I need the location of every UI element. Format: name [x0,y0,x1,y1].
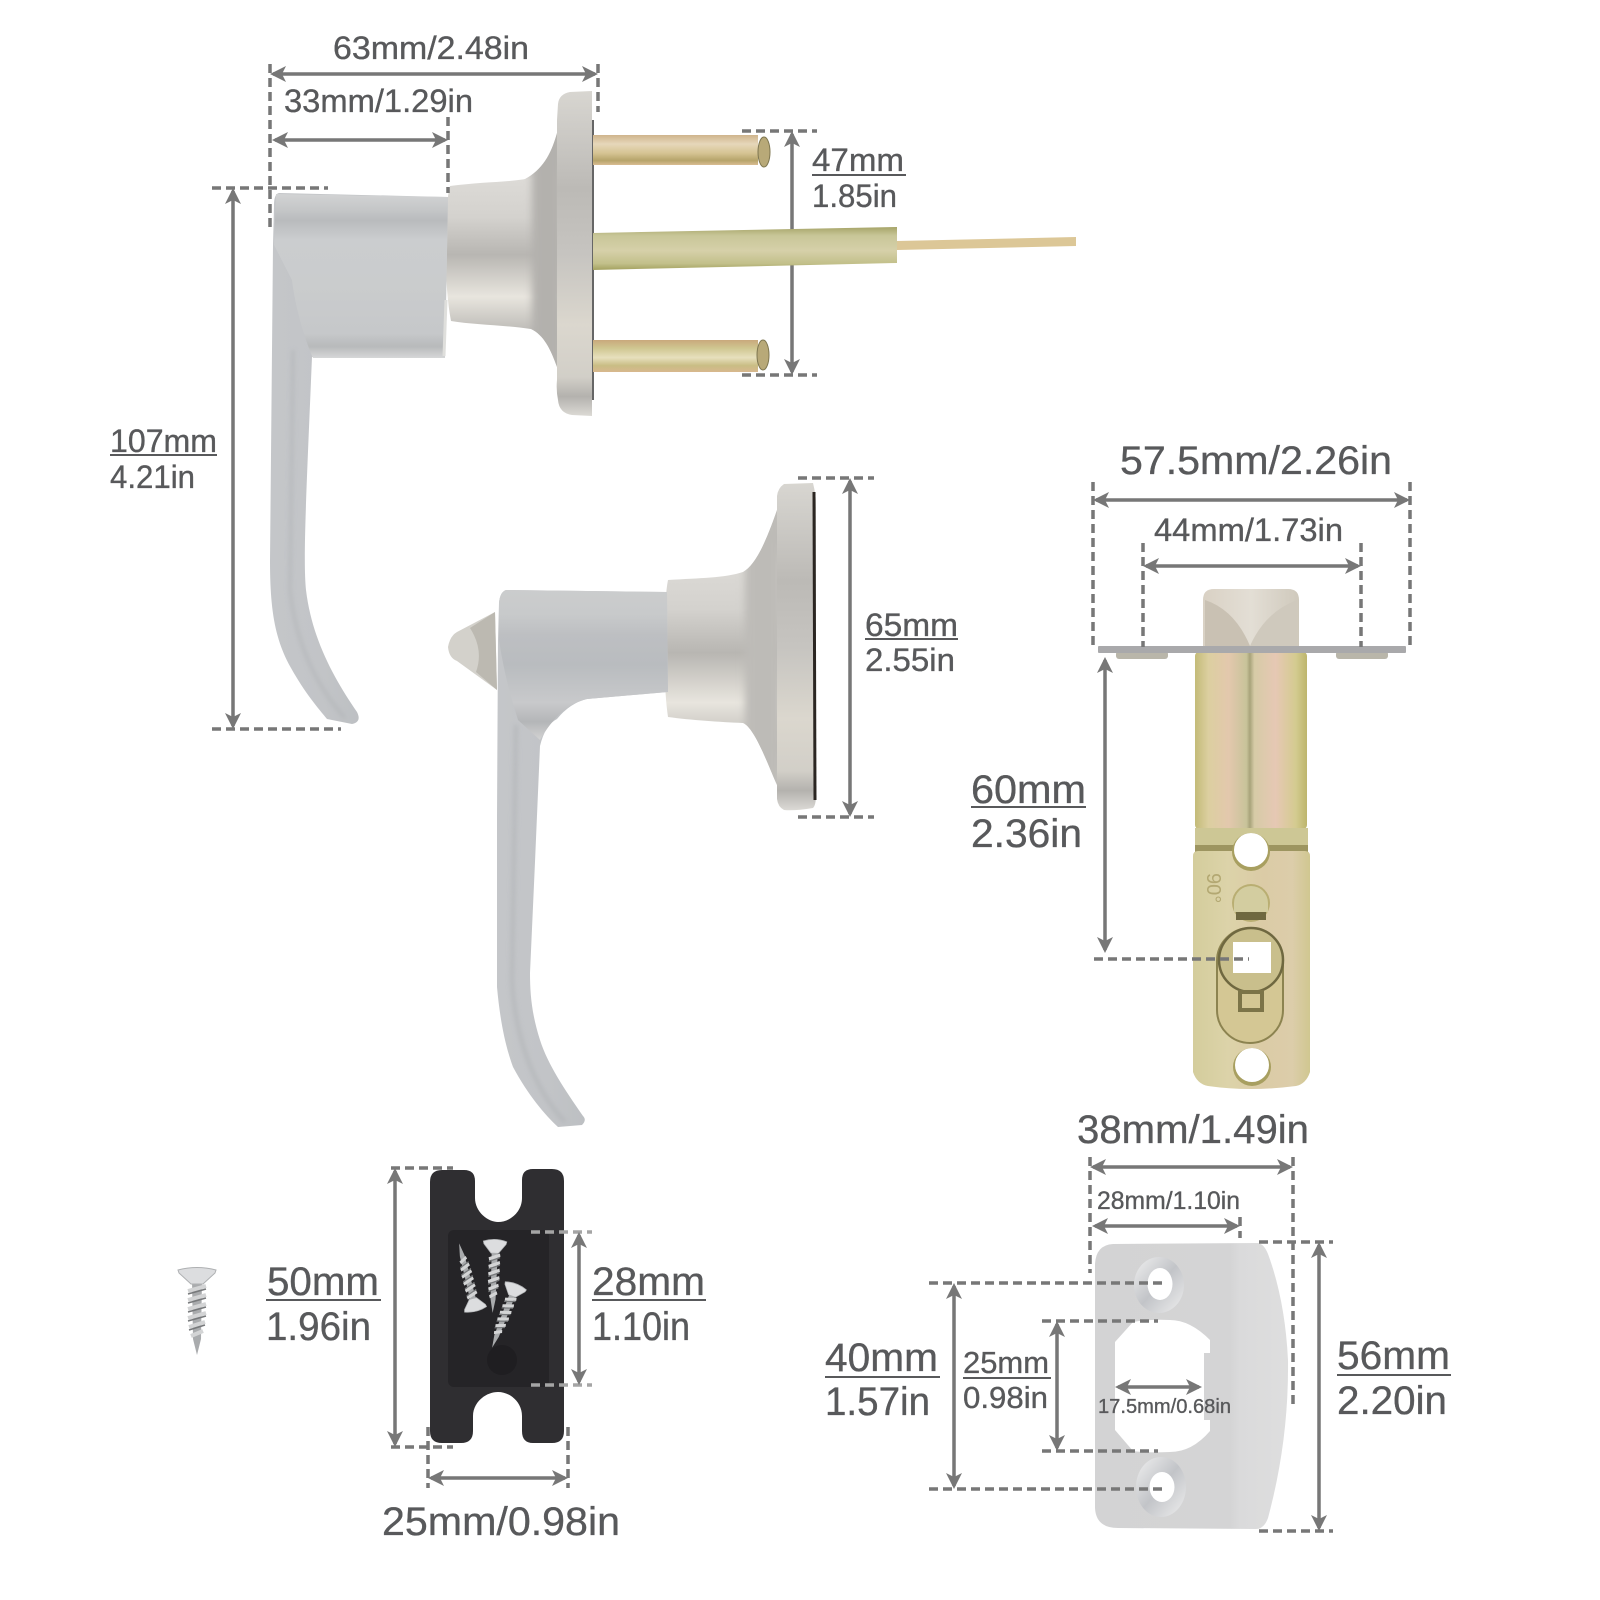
dimension: 56mm: 2.20in [1337,1379,1447,1423]
dimension: 107mm: 107mm [110,423,217,459]
latch tube [1195,652,1307,829]
latch faceplate [1098,646,1406,659]
dimension: 65mm [798,478,958,817]
dimension: 50mm: 50mm [267,1260,379,1304]
dimension: 44mm: 44mm/1.73in [1154,512,1343,548]
label: 47mm text [812,142,906,214]
dimension: 65mm: 2.55in [865,642,955,678]
rose plate [557,91,593,416]
dimension: 50mm [266,1168,453,1447]
dimension: 17.5mm: 17.5mm/0.68in [1098,1396,1231,1418]
rose plate [777,483,816,810]
strike plate body [1095,1243,1288,1529]
dimension: 28mm [531,1232,706,1385]
dimension: 60mm: 60mm [971,768,1086,812]
dimension: 50mm: 1.96in [266,1305,371,1349]
panel: latch bolt [971,439,1410,1089]
square spindle [593,227,1076,270]
dimension: 57.5mm: 57.5mm/2.26in [1120,439,1392,483]
black plate [430,1169,564,1443]
dimension: 56mm: 56mm [1337,1334,1450,1378]
neck [666,510,777,785]
latch lower case [1193,851,1310,1089]
dimension: 28mm: 28mm [592,1260,705,1304]
icon: three screws in recess [448,1239,527,1352]
dimension: 33mm: 33mm/1.29in [284,83,473,119]
dimension arrow passing behind spindle: 47mm [742,131,817,375]
mounting pin: top [593,135,770,167]
label: 47mm text: 47mm [812,142,904,178]
dimension: 28mm/1.10in: 28mm/1.10in [1097,1187,1240,1215]
latch collar [1195,828,1308,853]
dimension: 56mm [1259,1242,1451,1531]
latch lower case: 90° [1202,873,1224,903]
dimension: 40mm [825,1283,1166,1489]
neck [446,133,557,367]
dimension: 60mm [971,660,1249,959]
dimension: 40mm: 40mm [825,1336,938,1380]
latch bolt head [1203,589,1299,646]
dimension: 65mm: 65mm [865,607,958,643]
dimension: 63mm: 63mm/2.48in [333,30,529,66]
dimension: 25mm: 0.98in [963,1380,1048,1415]
dimension: 60mm: 2.36in [971,812,1082,856]
panel: screws and black cover plate [178,1168,706,1544]
dimension: 107mm [110,188,341,729]
dimension: 38mm: 38mm/1.49in [1077,1108,1309,1152]
screw hole: top [1134,1257,1184,1313]
dimension: 28mm: 1.10in [592,1305,690,1349]
holes and spindle slot [1217,833,1283,1086]
screw hole: bottom [1136,1457,1186,1517]
lever handle [497,590,668,1127]
icon: single screw [178,1268,216,1355]
turn button [448,612,497,690]
dimension: 107mm: 4.21in [110,459,195,495]
panel: strike plate [825,1108,1451,1531]
dimension: 25mm: 25mm/0.98in [382,1500,620,1544]
dimension: 40mm: 1.57in [825,1380,930,1424]
panel: lever with turn button (middle) [448,478,958,1127]
lever handle [270,193,448,724]
mounting pin: bottom [593,340,769,372]
infographic: lever lock dimensions [110,35,1451,1536]
dimension: 25mm [963,1321,1158,1451]
panel: lever with spindle (top) [110,30,1076,729]
dimension: 25mm: 25mm [963,1345,1049,1380]
label: 47mm text: 1.85in [812,178,897,214]
